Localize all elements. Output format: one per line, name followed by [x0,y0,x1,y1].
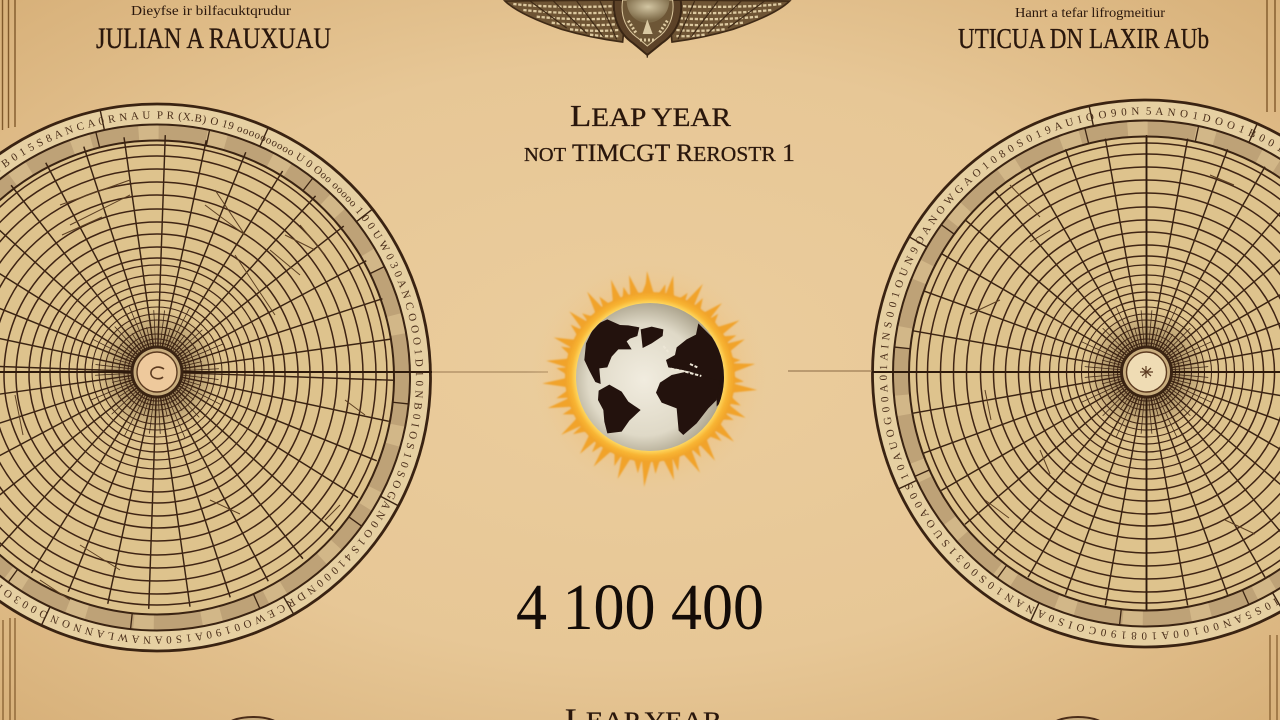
sun disc [565,292,735,462]
right calendar dial [871,98,1280,648]
crest shield [614,0,681,58]
icon: globe in sun [536,270,758,487]
left dial hub [132,347,182,397]
centre title [524,98,795,167]
connector line right [788,370,872,372]
right dial sketch marks [970,175,1255,534]
continents [584,319,725,435]
bottom right ornament (cropped) [1050,717,1106,720]
emblem: winged crest [505,0,790,58]
globe sphere [576,303,724,451]
right small heading: Hanrt a tefar lifrogmeitiur [1015,6,1165,21]
rule numbers: 4 100 400: 4 100 400 [516,571,764,644]
subtitle line: NOT TIMCGT REROSTR 1 [524,140,795,167]
border lines: right bottom [1270,635,1277,720]
sun glow [526,253,774,501]
left dial sketch marks [15,180,365,600]
left small heading: Dieyfse ir bilfacuktqrudur [131,4,291,19]
right dial hub [1122,347,1172,397]
connector line left [432,371,548,373]
left column heading [96,4,331,55]
left calendar dial [0,102,432,652]
left wing [505,0,627,42]
left large heading: JULIAN A RAUXUAU [96,22,331,55]
border lines: left top [2,0,15,130]
right wing [668,0,790,42]
bottom left ornament (cropped) [225,717,281,720]
right large heading: UTICUA DN LAXIR AUb [958,23,1209,55]
border lines: left bottom [3,618,15,720]
border lines: right top [1267,0,1275,112]
title line: leap year: LEAP YEAR [570,98,732,133]
right column heading [958,6,1209,55]
sun flames [542,271,758,487]
